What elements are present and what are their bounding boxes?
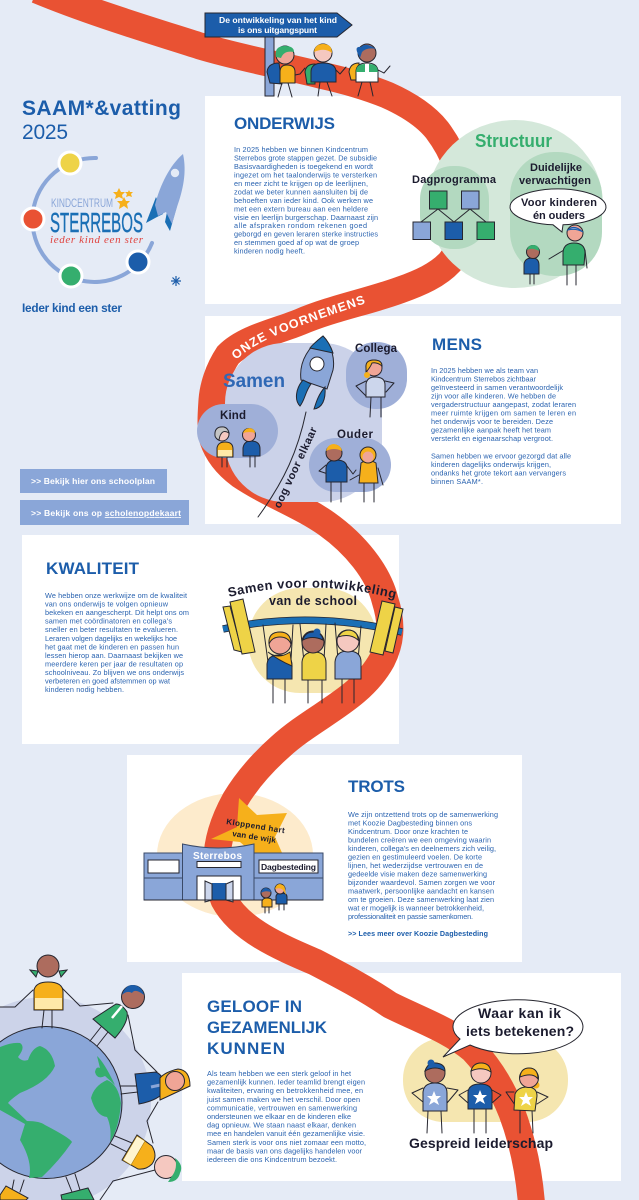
button: schoolplan xyxy=(20,469,167,493)
text block: kwaliteit: Leraren volgen dagelijks en wekelijks hoe xyxy=(45,634,177,643)
illustration: structuur xyxy=(412,120,606,288)
panel: geloof background xyxy=(182,973,621,1181)
heading: geloof in gezamenlijk kunnen: KUNNEN xyxy=(207,1039,285,1058)
text block: kwaliteit xyxy=(45,591,189,694)
text block: trots: bundelen creëren we een omgeving waarin xyxy=(348,836,491,844)
text block: trots: gezien en gestimuleerd voelen. De korte xyxy=(348,852,482,862)
text block: geloof: mee en handelen vanuit één gezamenlijke visie. xyxy=(207,1129,365,1138)
asterisk mark xyxy=(171,276,181,286)
illustration: gespreid leiderschap xyxy=(409,1000,583,1151)
illustration: school building: Sterrebos xyxy=(193,851,242,862)
star: van de wijk xyxy=(232,829,277,845)
star: Kloppend hart xyxy=(226,817,286,835)
text block: mens: Samen hebben we ervoor gezorgd dat alle xyxy=(431,452,571,460)
illustration: samen: Collega xyxy=(355,343,398,355)
text block: mens: Kindcentrum Sterrebos zichtbaar xyxy=(431,374,537,384)
title block: 2025 xyxy=(22,121,68,144)
text block: trots: bijzonder waardevol. Samen zorgen we voor xyxy=(348,878,496,887)
collega figure xyxy=(356,360,394,417)
text block: mens: In 2025 hebben we als team van xyxy=(431,366,538,375)
text block: onderwijs: Basisvaardigheden is toegekend en wordt xyxy=(234,162,373,171)
illustration: structuur: Duidelijke xyxy=(530,162,582,174)
text block: geloof: kwaliteiten, ervaring en betrokkenheid mee, en xyxy=(207,1086,363,1095)
sign: starting point xyxy=(205,13,352,96)
person with green shirt xyxy=(93,985,144,1038)
text block: mens: vergaderstructuur aangepast, zodat leraren xyxy=(431,400,576,409)
text block: mens xyxy=(431,366,576,486)
winding red ribbon xyxy=(37,0,532,1200)
text block: mens: binnen SAAM*. xyxy=(431,477,483,486)
panel: kwaliteit background xyxy=(22,535,399,744)
text block: kwaliteit: lessen hierop aan. Daarnaast bekijken we xyxy=(45,651,183,660)
heading: trots: TROTS xyxy=(348,777,405,796)
logo: Kindcentrum Sterrebos: KINDCENTRUM xyxy=(51,196,113,210)
arms linking xyxy=(0,988,158,1200)
text block: kwaliteit: samen met coördinatoren en collega's xyxy=(45,617,172,626)
trots illustration backdrop xyxy=(157,793,313,917)
text block: mens: kinderen dagelijks onderwijs krijgen, xyxy=(431,460,551,469)
logo: Kindcentrum Sterrebos xyxy=(22,152,185,287)
text block: geloof: Als team hebben we een sterk geloof in het xyxy=(207,1069,351,1078)
illustration: samen voor ontwikkeling: Samen voor ontwikkeling xyxy=(228,580,396,600)
title block xyxy=(22,97,181,144)
text block: kwaliteit: bekeken en aangescherpt. Dit helpt ons om xyxy=(45,608,189,617)
figures: three children walking xyxy=(267,44,390,97)
text block: kwaliteit: schoolniveau. Zo blijven we ons onderwijs xyxy=(45,668,184,677)
text block: mens: zijn voor alle kinderen. We hebben de xyxy=(431,392,556,400)
text block: mens: ondanks het grote tekort aan vervangers xyxy=(431,468,566,478)
text block: onderwijs: kinderen nodig heeft. xyxy=(234,247,305,256)
sign: starting point: is ons uitgangspunt xyxy=(238,25,317,35)
text block: kwaliteit: We hebben onze werkwijze om de kwaliteit xyxy=(45,591,187,600)
illustration: samen voor ontwikkeling: van de school xyxy=(269,594,357,608)
heading: geloof in gezamenlijk kunnen xyxy=(207,997,328,1058)
person with blue shirt xyxy=(135,1069,190,1104)
ouder figures xyxy=(319,444,383,502)
text block: geloof: juist samen maken we het verschil. Door open xyxy=(206,1095,360,1104)
text block: kwaliteit: het gaat met de kinderen en passen hun xyxy=(45,642,179,651)
text block: onderwijs: met een extern bureau aan een heldere xyxy=(234,204,368,213)
legs xyxy=(12,1010,138,1192)
text block: onderwijs: In 2025 hebben we binnen Kindcentrum xyxy=(234,145,368,154)
illustration: globe with people xyxy=(0,955,190,1200)
text block: geloof: iedereen die ons Kindcentrum bezoekt. xyxy=(207,1155,337,1164)
title block: SAAM*&vatting xyxy=(22,97,181,120)
heading: mens: MENS xyxy=(432,335,482,354)
heading: geloof in gezamenlijk kunnen: GELOOF IN xyxy=(207,997,302,1016)
kwaliteit illustration backdrop xyxy=(248,588,377,693)
link: koozie dagbesteding: >> Lees meer over Koozie Dagbesteding xyxy=(348,930,488,938)
text block: trots xyxy=(347,810,498,921)
text block: mens: gezamenlijke aanpak heeft het team xyxy=(431,426,551,434)
illustration: samen voor ontwikkeling xyxy=(222,580,404,704)
illustration: structuur: Dagprogramma xyxy=(412,174,497,186)
continents xyxy=(0,1043,121,1178)
text block: onderwijs: geborgd en geven leraren sterke instructies xyxy=(234,230,378,239)
text block: trots: We zijn ontzettend trots op de samenwerking xyxy=(348,810,498,819)
text block: geloof: gezamenlijk kunnen. Ieder teamlid brengt eigen xyxy=(207,1078,365,1087)
text block: onderwijs: ingezet om het taalonderwijs te versterken xyxy=(234,170,377,179)
button: schoolplan: >> Bekijk hier ons schoolplan xyxy=(31,476,155,486)
text block: onderwijs xyxy=(234,145,378,256)
text block: trots: maatwerk, persoonlijke aandacht en kansen xyxy=(348,886,494,896)
text block: geloof: communicatie, vertrouwen en samenwerking xyxy=(207,1103,357,1112)
text block: trots: kinderen, collega's en deelnemers zich veilig, xyxy=(348,844,496,853)
kind figures xyxy=(215,427,260,467)
text block: onderwijs: en meer zicht te krijgen op de leerlijnen, xyxy=(234,179,368,188)
text block: trots: om te groeien. Deze samenwerking laat zien xyxy=(348,895,494,904)
text block: onderwijs: Sterrebos grote stappen gezet. De subsidie xyxy=(234,154,377,162)
barbell xyxy=(223,599,403,655)
speech bubble xyxy=(443,1000,583,1057)
illustration: school building xyxy=(144,798,323,913)
text block: mens: meer ruimte krijgen om samen te leren en xyxy=(431,408,576,418)
illustration: samen: Samen xyxy=(223,371,285,392)
text block: trots: gedeelde visie maken deze samenwerking xyxy=(348,870,487,878)
illustration: structuur: Voor kinderen xyxy=(521,197,597,209)
illustration: samen: Ouder xyxy=(337,429,374,441)
speech bubble: Waar kan ik xyxy=(478,1005,561,1021)
button: scholenopdekaart: >> Bekijk ons op scholenopdekaart xyxy=(31,508,181,518)
star xyxy=(211,798,287,855)
text block: kwaliteit: kinderen nodig hebben. xyxy=(45,685,124,694)
logo: Kindcentrum Sterrebos: ieder kind een ster xyxy=(50,234,144,246)
weightlifters xyxy=(263,623,361,703)
rocket xyxy=(296,336,334,409)
heading: kwaliteit: KWALITEIT xyxy=(46,559,140,578)
sign: starting point: De ontwikkeling van het kind xyxy=(219,15,337,25)
text block: kwaliteit: van ons onderwijs te volgen opnieuw xyxy=(45,600,169,609)
text block: onderwijs: behoeften van ieder kind. Ook werken we xyxy=(234,196,373,205)
speech bubble: iets betekenen? xyxy=(466,1023,574,1039)
text block: trots: wat er mogelijk is wanneer betrokkenheid, xyxy=(347,904,484,912)
text block: geloof: ondersteunen we elkaar en de kinderen elke xyxy=(207,1112,351,1121)
text block: mens: geïnvesteerd in samen verantwoordelijk xyxy=(431,383,563,392)
small children xyxy=(261,884,287,913)
text block: trots: Kindcentrum. Door onze krachten te xyxy=(348,827,468,836)
text block: geloof: maar de basis van ons dagelijks handelen voor xyxy=(207,1146,363,1155)
illustration: samen: Kind xyxy=(220,410,246,422)
text block: geloof: dag opnieuw. We staan naast elkaar, denken xyxy=(207,1121,356,1130)
panel: mens background xyxy=(205,316,621,524)
illustration: structuur: én ouders xyxy=(533,210,585,222)
text block: mens: versterkt en eigenaarschap vergroot. xyxy=(431,434,553,443)
text block: onderwijs: en stemmen goed af op wat de groep xyxy=(234,238,359,247)
text block: onderwijs: alle afspraken rondom rekenen goed xyxy=(234,221,367,230)
text block: onderwijs: zodat we beter kunnen aansluiten bij de xyxy=(234,187,368,196)
logo: Kindcentrum Sterrebos: STERREBOS xyxy=(50,207,143,238)
geloof illustration backdrop xyxy=(403,1038,568,1122)
text block: kwaliteit: meerdere keren per jaar de resultaten op xyxy=(45,659,183,668)
panel: trots background xyxy=(127,755,522,962)
tagline: Ieder kind een ster xyxy=(22,301,122,315)
text block: trots: lijnen, het wederzijdse vertrouwen en de xyxy=(348,861,483,870)
heading: onderwijs: ONDERWIJS xyxy=(234,114,335,133)
text block: geloof: Samen sterk is voor ons niet zomaar een motto, xyxy=(207,1138,366,1147)
rocket xyxy=(146,154,185,231)
illustration: gespreid leiderschap: Gespreid leiderschap xyxy=(409,1135,553,1151)
button: scholenopdekaart xyxy=(20,500,189,525)
text block: trots: professionaliteit en passie samenkomen. xyxy=(348,912,473,921)
person with orange shirt xyxy=(122,1135,181,1182)
illustration: school building: Dagbesteding xyxy=(261,862,316,872)
illustration: samen: oog voor elkaar xyxy=(272,425,320,510)
illustration: structuur: verwachtigen xyxy=(519,175,591,187)
text block: onderwijs: visie en leerlijn burgerschap. Daarnaast zijn xyxy=(234,213,378,222)
bottom shirts xyxy=(0,1186,28,1200)
text block: kwaliteit: verbeteren en goed afstemmen op wat xyxy=(45,676,170,686)
text block: trots: met Koozie Dagbesteding binnen ons xyxy=(348,818,472,828)
illustration: samen xyxy=(197,336,407,517)
ribbon label: ONZE VOORNEMENS xyxy=(232,296,364,358)
text block: mens: het onderwijs voor te bereiden. Deze xyxy=(431,417,553,426)
text block: geloof xyxy=(206,1069,366,1164)
panel: onderwijs background xyxy=(205,96,621,304)
top person xyxy=(30,955,67,1010)
text block: kwaliteit: sneller en beter resultaten te evalueren. xyxy=(45,625,178,634)
heading: geloof in gezamenlijk kunnen: GEZAMENLIJK xyxy=(207,1018,328,1037)
illustration: structuur: Structuur xyxy=(475,131,552,151)
